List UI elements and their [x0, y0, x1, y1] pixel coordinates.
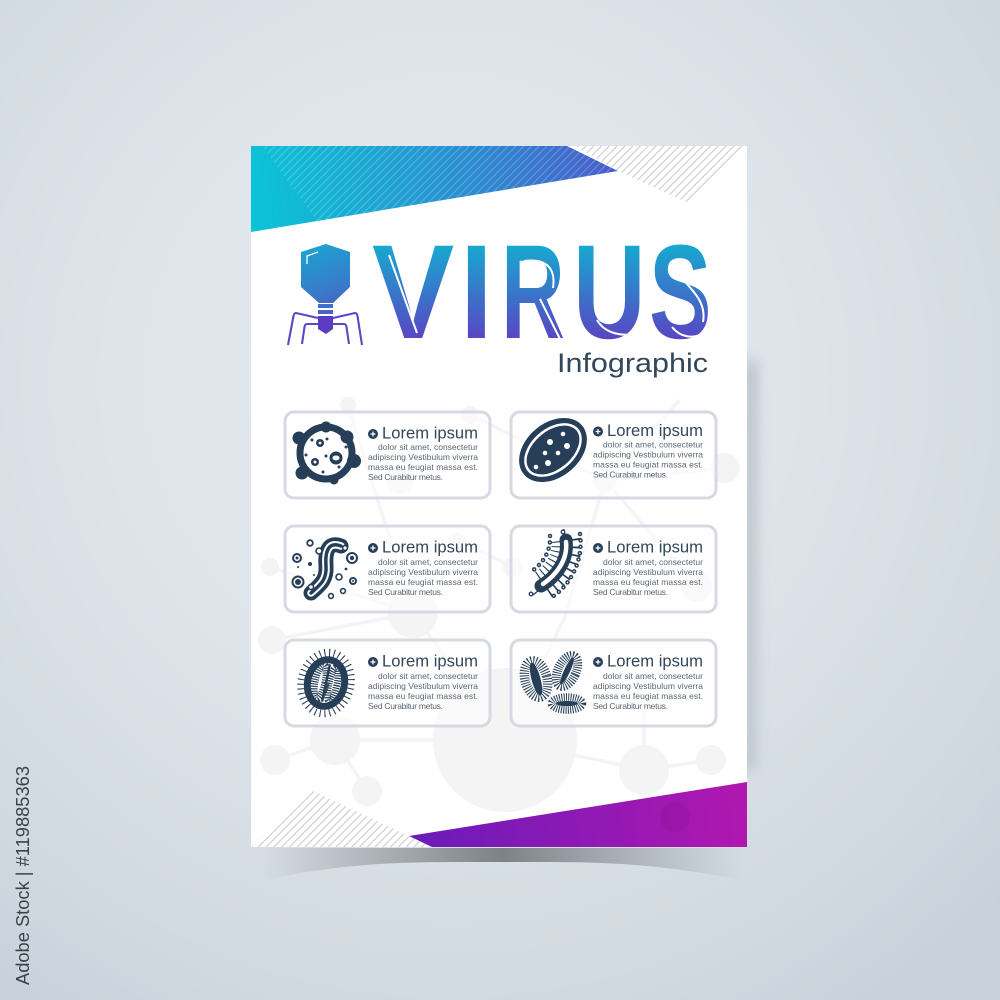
panel: card 1 [285, 412, 490, 498]
text block: massa eu feugiat massa est. [593, 577, 703, 587]
panel: card 2 [507, 405, 716, 498]
panel: card 6 [511, 640, 716, 726]
panel: card 5 [285, 640, 490, 726]
text block [368, 671, 478, 711]
bottom colour banner [409, 782, 747, 847]
text block [368, 557, 478, 597]
text block [593, 671, 703, 711]
icon: spiked oval virus [296, 649, 356, 717]
top colour banner [251, 146, 618, 232]
heading with plus icon: Lorem ipsum [382, 424, 478, 442]
text block: Sed Curabitur metus. [593, 470, 668, 480]
text block: Sed Curabitur metus. [368, 701, 443, 711]
text block: dolor sit amet, consectetur [603, 671, 703, 681]
title: VIRUS: V [372, 217, 454, 367]
icon: bacteriophage logo [288, 244, 362, 345]
text block: adipiscing Vestibulum viverra [368, 567, 478, 577]
text block: Sed Curabitur metus. [368, 587, 443, 597]
bottom grey hatch [251, 790, 432, 847]
text block: dolor sit amet, consectetur [378, 442, 478, 452]
title: VIRUS: I [460, 217, 493, 367]
background molecule network [258, 397, 740, 812]
text block: massa eu feugiat massa est. [368, 462, 478, 472]
text block: Sed Curabitur metus. [593, 701, 668, 711]
heading with plus icon: Lorem ipsum [607, 652, 703, 670]
icon: round virus [292, 422, 361, 484]
top grey hatch [575, 146, 747, 204]
text block: massa eu feugiat massa est. [593, 691, 703, 701]
text block [368, 442, 478, 482]
text block [593, 440, 703, 480]
panel: card 3 [285, 526, 490, 612]
heading with plus icon: Lorem ipsum [607, 421, 703, 440]
text block: dolor sit amet, consectetur [378, 671, 478, 681]
text block: dolor sit amet, consectetur [378, 557, 478, 567]
text block: adipiscing Vestibulum viverra [593, 567, 703, 577]
heading with plus icon: Lorem ipsum [607, 538, 703, 556]
text block: adipiscing Vestibulum viverra [368, 452, 478, 462]
text block: adipiscing Vestibulum viverra [593, 450, 703, 460]
icon: wavy bacterium [292, 540, 357, 598]
text block: massa eu feugiat massa est. [368, 691, 478, 701]
title: VIRUS: U [573, 218, 646, 367]
title: VIRUS [372, 216, 712, 368]
panel: card 4 [511, 526, 716, 612]
text block: Sed Curabitur metus. [368, 472, 443, 482]
heading with plus icon: Lorem ipsum [382, 538, 478, 556]
text block: adipiscing Vestibulum viverra [593, 681, 703, 691]
icon: rod bacterium with pili [529, 529, 581, 597]
title: VIRUS: S [649, 216, 712, 367]
watermark attribution: Adobe Stock | #119885363 [12, 766, 33, 985]
text block [593, 557, 703, 597]
icon: oval cell [507, 405, 599, 495]
text block: dolor sit amet, consectetur [603, 557, 703, 567]
text block: dolor sit amet, consectetur [603, 440, 703, 450]
text block: adipiscing Vestibulum viverra [368, 681, 478, 691]
heading with plus icon: Lorem ipsum [382, 652, 478, 670]
title: VIRUS: R [501, 218, 565, 368]
text block: Sed Curabitur metus. [593, 587, 668, 597]
poster sheet [251, 146, 747, 847]
page bottom shadow [262, 848, 742, 880]
subtitle: Infographic [557, 348, 708, 378]
text block: massa eu feugiat massa est. [368, 577, 478, 587]
text block: massa eu feugiat massa est. [593, 460, 703, 470]
icon: three spiked cells [521, 652, 582, 710]
page side shadow [745, 360, 756, 770]
